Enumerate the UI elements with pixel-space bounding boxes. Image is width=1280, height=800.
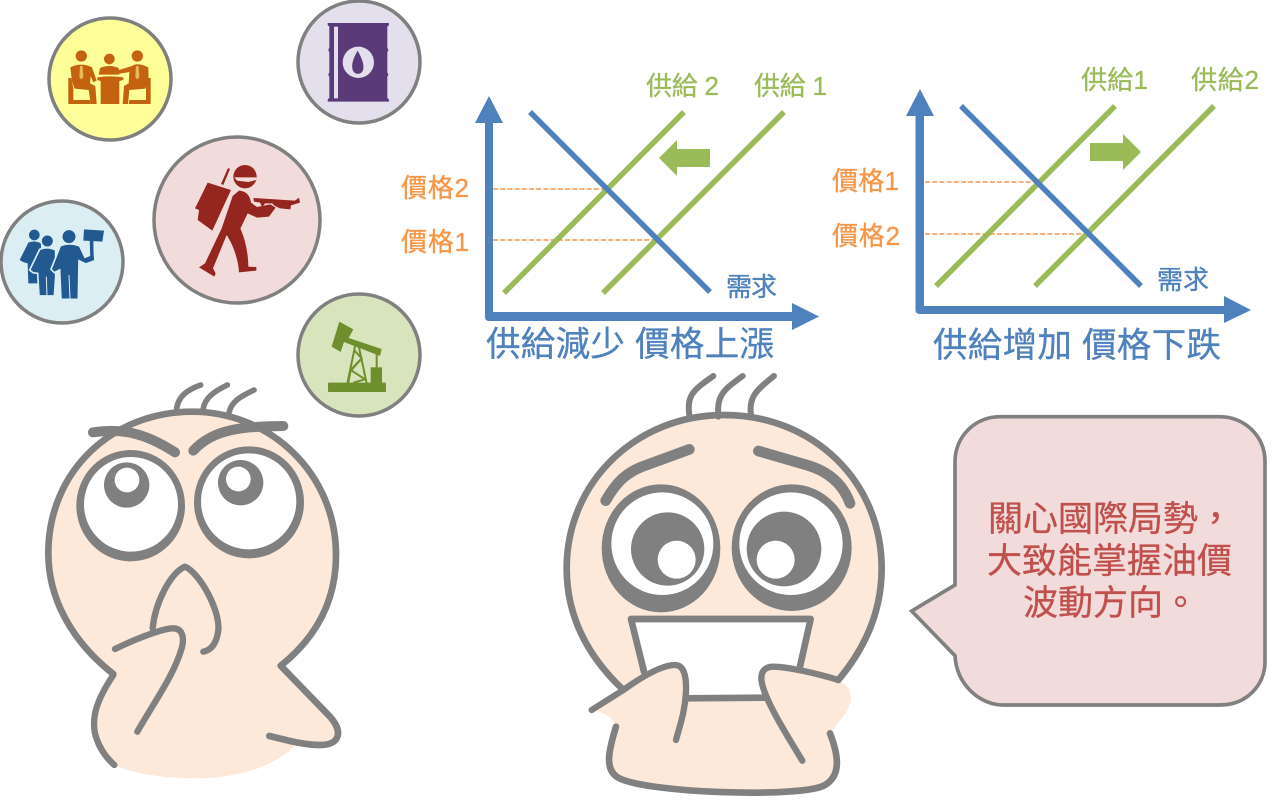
- character: happy man: [567, 376, 882, 793]
- label: demand: 需求: [726, 272, 777, 302]
- chart: supply increases, price falls: [832, 65, 1259, 365]
- icon: oil barrel in purple circle: [298, 1, 420, 123]
- icon: oil pumpjack in green circle: [298, 294, 420, 416]
- bubble text: 關心國際局勢，: [988, 500, 1233, 539]
- label: demand: 需求: [1157, 265, 1209, 295]
- price guide lines: [925, 182, 1086, 234]
- label: price 1: 價格1: [832, 166, 899, 196]
- label: price 1: 價格1: [401, 227, 469, 257]
- axes: [475, 96, 819, 330]
- price guide lines: [493, 189, 655, 240]
- speech bubble: [912, 417, 1265, 705]
- label: supply 1: 供給 1: [754, 71, 827, 101]
- supply curves: [504, 112, 784, 293]
- demand curve: [961, 106, 1141, 286]
- chart: supply decreases, price rises: [401, 71, 827, 364]
- bubble text: 波動方向。: [1023, 584, 1198, 623]
- label: supply 1: 供給1: [1081, 65, 1148, 95]
- label: supply 2: 供給 2: [646, 71, 719, 101]
- axes: [906, 89, 1251, 323]
- icon: protesters in blue circle: [1, 201, 123, 323]
- icon: meeting in yellow circle: [49, 18, 171, 140]
- label: supply 2: 供給2: [1191, 65, 1259, 95]
- label: price 2: 價格2: [832, 221, 900, 251]
- arrow: supply shifts left: [659, 140, 710, 176]
- character: thinking man: [48, 385, 339, 778]
- demand curve: [530, 112, 710, 292]
- bubble text: 大致能掌握油價: [987, 542, 1232, 581]
- chart title: 供給增加 價格下跌: [933, 327, 1221, 365]
- icon: soldier in red circle: [154, 137, 320, 303]
- supply curves: [936, 106, 1214, 286]
- arrow: supply shifts right: [1090, 134, 1141, 170]
- label: price 2: 價格2: [401, 173, 469, 203]
- chart title: 供給減少 價格上漲: [486, 326, 774, 364]
